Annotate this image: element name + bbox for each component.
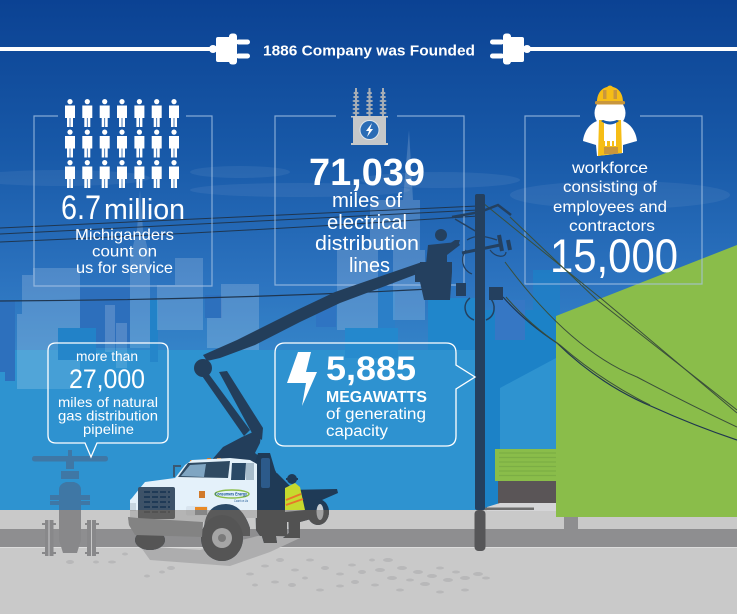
text: megawatts: MEGAWATTS bbox=[326, 389, 427, 406]
text: workforce description: workforce bbox=[571, 160, 648, 177]
text: of generating capacity: of generating bbox=[326, 406, 426, 423]
text: of generating capacity: capacity bbox=[326, 423, 388, 440]
truck rear: body and flatbed bbox=[255, 453, 338, 536]
gas valve bbox=[32, 450, 108, 556]
truck rear axle wheel bbox=[135, 530, 165, 550]
text: workforce description: contractors bbox=[569, 218, 655, 235]
side window bbox=[231, 463, 246, 480]
worker in vest bbox=[273, 473, 305, 538]
panel: workforce bbox=[525, 86, 702, 284]
text: miles of electrical distribution lines: distribution bbox=[315, 233, 419, 255]
header bbox=[0, 34, 737, 64]
text: Michiganders: count on bbox=[92, 244, 157, 260]
truck shadow bbox=[140, 535, 300, 566]
text: workforce description: employees and bbox=[553, 199, 667, 216]
text: pipeline description: miles of natural bbox=[58, 394, 158, 410]
icon: people grid bbox=[65, 99, 179, 188]
text: miles of electrical distribution lines: lines bbox=[349, 255, 390, 277]
hood lights bbox=[190, 458, 221, 462]
left plug icon bbox=[209, 34, 250, 64]
city skyline bbox=[0, 130, 560, 510]
header title: 1886 Company was Founded bbox=[263, 44, 475, 60]
stat: 6.7 million: million bbox=[104, 194, 185, 226]
bucket and lineman bbox=[415, 229, 460, 300]
text: more than: more than bbox=[76, 349, 138, 364]
stat: 5,885: 5,885 bbox=[326, 350, 416, 388]
boom lift arm bbox=[194, 262, 425, 466]
text: Michiganders: us for service bbox=[76, 260, 173, 277]
text: pipeline description: pipeline bbox=[83, 421, 134, 437]
stat: 71,039: 71,039 bbox=[309, 152, 425, 194]
text: Michiganders: Michiganders bbox=[75, 227, 174, 244]
right plug icon bbox=[490, 34, 531, 64]
crossarm and hardware bbox=[452, 205, 511, 320]
windshield bbox=[178, 461, 230, 478]
headlights bbox=[186, 506, 208, 516]
truck bbox=[128, 453, 338, 561]
callout: natural gas bbox=[48, 343, 168, 457]
icon: lightning bolt bbox=[287, 352, 317, 406]
panel: distribution lines bbox=[275, 88, 464, 285]
stat: 15,000: 15,000 bbox=[550, 229, 678, 282]
door logo: Count on Us bbox=[234, 499, 248, 503]
text: pipeline description: gas distribution bbox=[58, 408, 158, 424]
text: miles of electrical distribution lines: miles of bbox=[332, 190, 402, 212]
truck cab bbox=[130, 458, 257, 522]
door logo bbox=[215, 490, 249, 503]
truck lower section muted bbox=[128, 510, 329, 561]
stat: 6.7 million: 6.7 bbox=[61, 189, 101, 227]
door logo: Consumers Energy bbox=[215, 492, 247, 498]
bumper bbox=[128, 517, 203, 537]
icon: worker with hard hat bbox=[583, 86, 637, 156]
icon: transformer bbox=[351, 88, 388, 145]
clouds bbox=[0, 166, 730, 209]
wires left bbox=[0, 206, 478, 301]
utility pole bbox=[452, 194, 511, 551]
callout: generating capacity bbox=[275, 343, 475, 446]
building: green wall bbox=[480, 245, 737, 531]
grille bbox=[138, 487, 175, 519]
text: workforce description: consisting of bbox=[563, 179, 658, 196]
text: miles of electrical distribution lines: electrical bbox=[327, 212, 407, 234]
wheel arch and front wheel bbox=[204, 504, 250, 536]
gravel bbox=[66, 552, 490, 594]
panel: customers bbox=[34, 99, 212, 286]
stat: 27,000: 27,000 bbox=[69, 364, 145, 394]
wires right bbox=[483, 203, 737, 440]
ground bbox=[0, 510, 737, 614]
